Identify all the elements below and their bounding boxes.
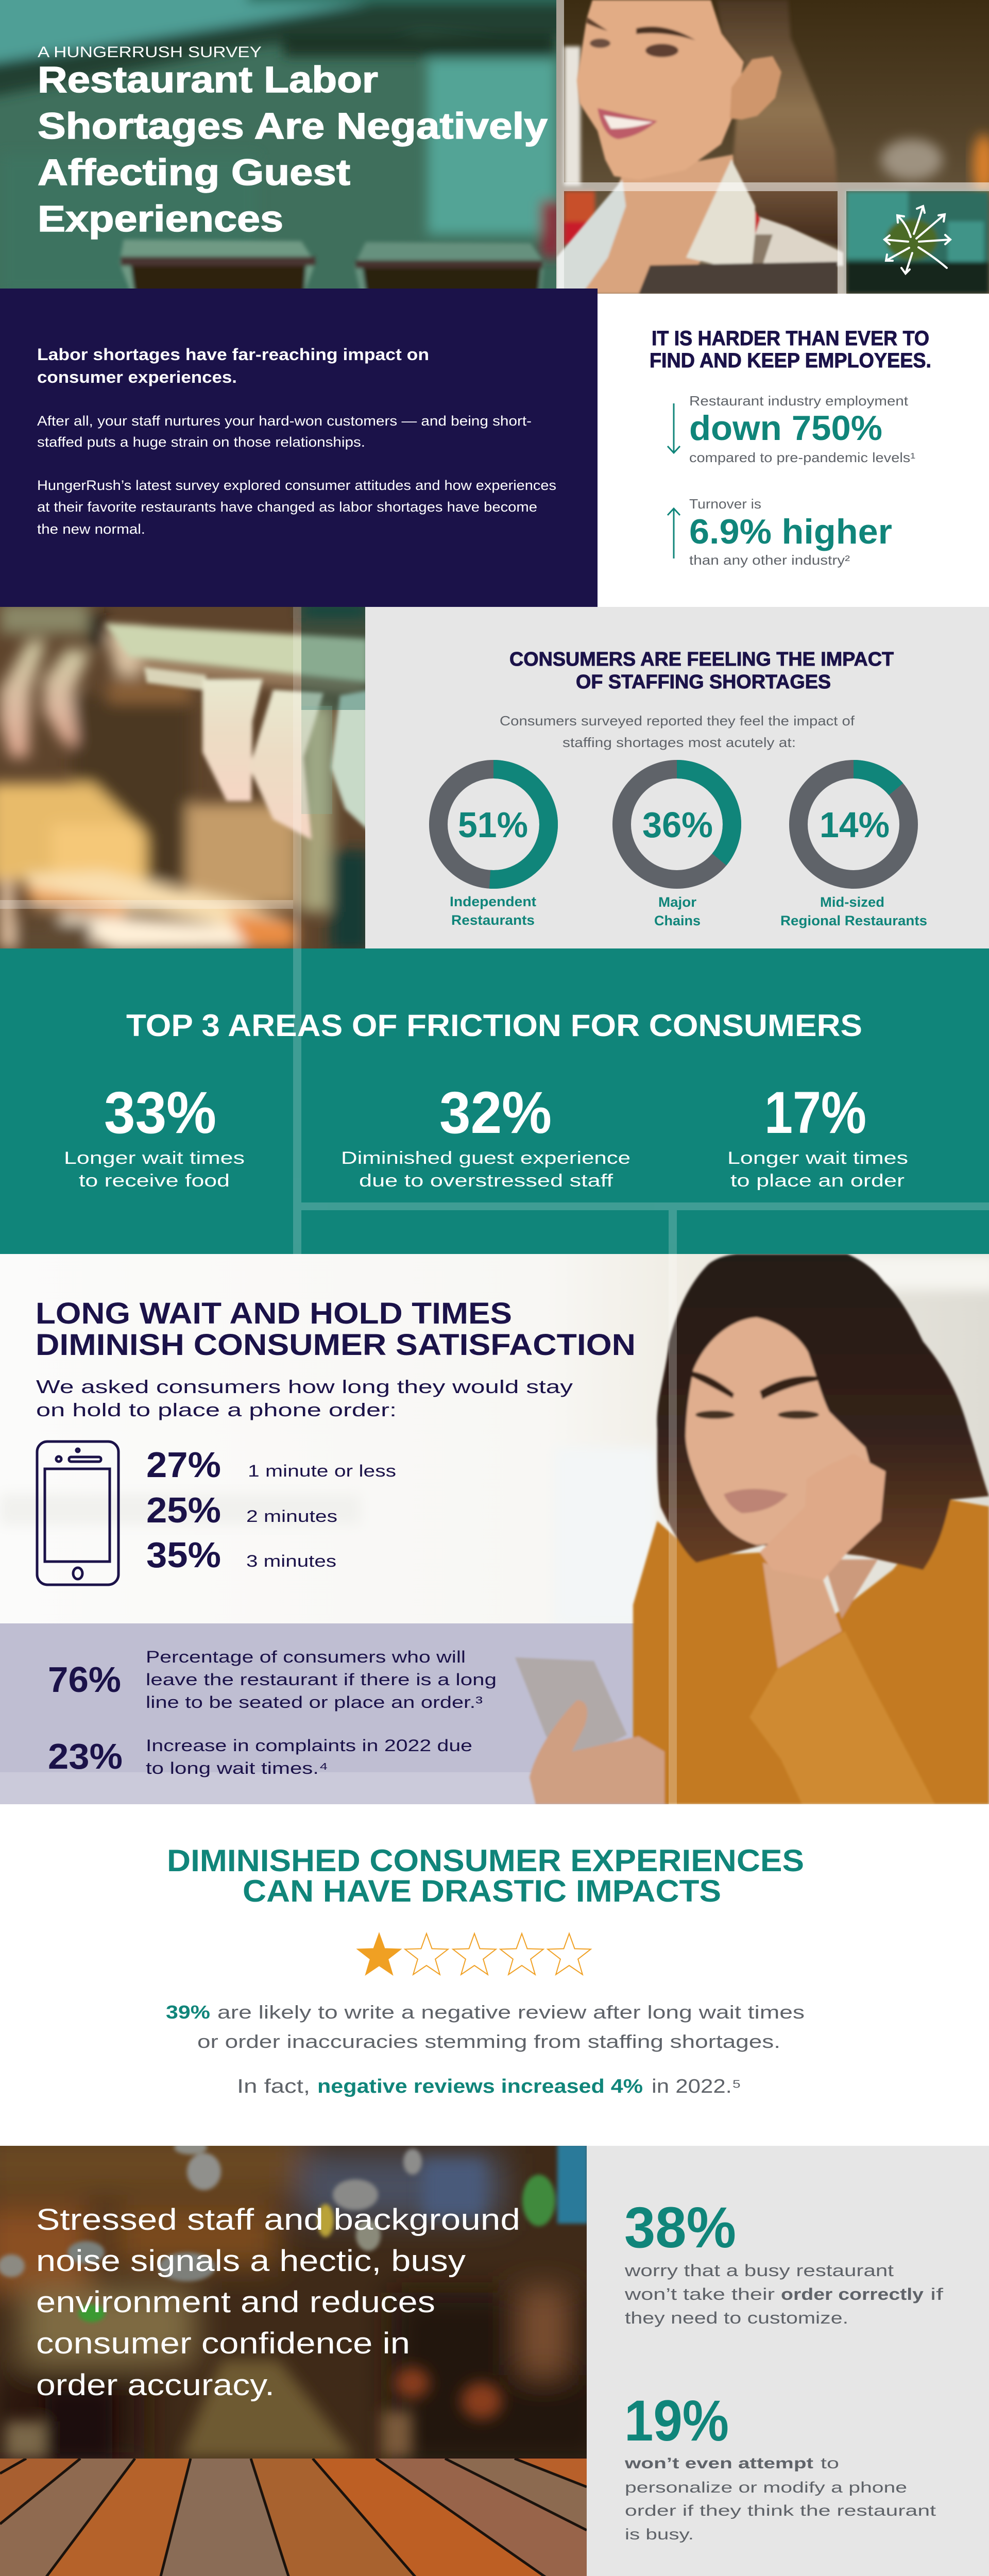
impact heading: CONSUMERS ARE FEELING THE IMPACT: [509, 649, 894, 670]
impact intro: [500, 713, 855, 750]
donut: 14% mid-sized regional: [780, 769, 927, 928]
stat: 76% leave: Percentage of consumers who will: [146, 1648, 466, 1666]
hold duration stats: 27%: [146, 1445, 221, 1485]
stat: employment: [689, 393, 915, 465]
panel: order accuracy stats: [587, 2146, 989, 2576]
negative review text: 39%: [166, 2002, 210, 2023]
impact heading: [509, 649, 894, 693]
hero right photo: smiling waitress: [556, 0, 989, 294]
panel: consumers feeling impact: [365, 607, 989, 948]
stressed staff statement: order accuracy.: [36, 2368, 275, 2402]
hold duration stats: 1 minute or less: [248, 1462, 396, 1480]
stat: 32%: 32%: [439, 1080, 552, 1146]
photo: kitchen order receipts: [0, 603, 371, 953]
negative review text: [166, 2002, 805, 2052]
intro body: HungerRush’s latest survey explored consumer attitudes and how experiences: [37, 478, 556, 493]
stats heading: IT IS HARDER THAN EVER TO: [652, 327, 929, 350]
reviews increased text: in 2022.⁵: [652, 2076, 741, 2097]
drastic heading: DIMINISHED CONSUMER EXPERIENCES: [167, 1843, 804, 1878]
impact intro: staffing shortages most acutely at:: [562, 735, 796, 750]
stat: turnover: than any other industry²: [689, 552, 850, 568]
stat: 17%: Longer wait times: [727, 1148, 908, 1168]
intro body: staffed puts a huge strain on those relationships.: [37, 434, 365, 450]
stat: 19%: personalize or modify a phone: [625, 2479, 907, 2496]
negative review text: are likely to write a negative review after long wait times: [217, 2002, 805, 2023]
stat: turnover: Turnover is: [689, 496, 761, 512]
wait intro: on hold to place a phone order:: [36, 1399, 397, 1420]
intro body: [37, 413, 556, 537]
stressed staff statement: [36, 2203, 520, 2402]
stat: 38%: order correctly: [781, 2285, 924, 2303]
stat: 38%: if: [930, 2285, 943, 2303]
photo: busy restaurant bokeh and table: [0, 2133, 608, 2576]
stat: 19%: 19%: [624, 2388, 729, 2453]
hero title: Affecting Guest: [38, 152, 350, 193]
icon: scattered arrows: [884, 206, 950, 274]
hold duration stats: 3 minutes: [246, 1552, 336, 1570]
icon: one of five stars: [357, 1934, 591, 1975]
stats heading: FIND AND KEEP EMPLOYEES.: [650, 349, 931, 372]
stat: 38%: [624, 2195, 943, 2327]
stat: 32%: [341, 1080, 630, 1191]
stat: employment: Restaurant industry employment: [689, 393, 909, 409]
wait heading: [36, 1297, 636, 1362]
hold duration stats: 2 minutes: [246, 1507, 337, 1526]
intro body: After all, your staff nurtures your hard-won customers — and being short-: [37, 413, 532, 429]
stressed staff statement: noise signals a hectic, busy: [36, 2244, 466, 2278]
hero title: Experiences: [38, 199, 283, 240]
stat: 76% leave: line to be seated or place an order.³: [146, 1693, 483, 1711]
stat: employment: down 750%: [689, 409, 882, 448]
impact intro: Consumers surveyed reported they feel the impact of: [500, 713, 855, 728]
stat: employment: compared to pre-pandemic levels¹: [689, 450, 915, 465]
donut: 51% independent restaurants: 51%: [458, 805, 528, 845]
stat: 19%: to: [821, 2455, 839, 2472]
stat: 23% complaints: to long wait times.⁴: [146, 1759, 328, 1777]
drastic heading: CAN HAVE DRASTIC IMPACTS: [243, 1874, 721, 1908]
friction heading: TOP 3 AREAS OF FRICTION FOR CONSUMERS: [126, 1008, 862, 1043]
donut: 51% independent restaurants: [438, 769, 549, 928]
stat: 19%: [624, 2388, 936, 2543]
grey stats overlay band: [0, 1623, 669, 1804]
donut: 36% major chains: Major: [658, 894, 696, 910]
stat: 38%: worry that a busy restaurant: [624, 2261, 894, 2280]
stat: 38%: 38%: [624, 2195, 736, 2260]
stat: 76% leave: leave the restaurant if there is a long: [146, 1670, 497, 1689]
stat: 17%: [727, 1080, 908, 1191]
icon: down arrow: [668, 403, 680, 453]
stat: 23% complaints: [48, 1736, 472, 1777]
stat: 17%: to place an order: [730, 1171, 905, 1191]
stat: 76% leave: 76%: [48, 1659, 121, 1700]
stat: 19%: is busy.: [625, 2526, 694, 2543]
wait heading: LONG WAIT AND HOLD TIMES: [36, 1297, 512, 1330]
wait heading: DIMINISH CONSUMER SATISFACTION: [36, 1328, 636, 1362]
stat: 76% leave: [48, 1648, 497, 1711]
stressed staff statement: Stressed staff and background: [36, 2203, 520, 2236]
negative review text: or order inaccuracies stemming from staffing shortages.: [197, 2031, 780, 2052]
stats heading: [650, 327, 931, 372]
donut: 36% major chains: [622, 769, 732, 928]
stat: turnover: [689, 496, 892, 568]
stat: turnover: 6.9% higher: [689, 512, 892, 551]
stat: 33%: Longer wait times: [64, 1148, 245, 1168]
intro body: the new normal.: [37, 521, 145, 537]
icon: phone: [37, 1442, 118, 1585]
stat: 19%: won’t even attempt: [624, 2455, 813, 2472]
stat: 32%: Diminished guest experience: [341, 1148, 630, 1168]
hold duration stats: [146, 1445, 396, 1575]
panel: top 3 friction: [0, 948, 989, 1254]
drastic heading: [167, 1843, 804, 1908]
reviews increased text: In fact,: [237, 2076, 310, 2097]
panel: long wait and hold times: [0, 1254, 989, 1804]
donut: 36% major chains: 36%: [642, 805, 713, 845]
icon: up arrow: [668, 509, 680, 558]
reviews increased text: negative reviews increased 4%: [317, 2076, 643, 2097]
stat: 33%: 33%: [104, 1080, 216, 1146]
donut: 36% major chains: Chains: [654, 913, 701, 928]
intro body: at their favorite restaurants have changed as labor shortages have become: [37, 499, 537, 515]
stat: 33%: to receive food: [79, 1171, 230, 1191]
impact heading: OF STAFFING SHORTAGES: [576, 671, 831, 693]
reviews increased text: [237, 2076, 741, 2097]
hero kicker: A HUNGERRUSH SURVEY: [38, 44, 262, 61]
donut: 14% mid-sized regional: Regional Restaurants: [780, 913, 927, 928]
stat: 23% complaints: 23%: [48, 1736, 123, 1776]
wait intro: We asked consumers how long they would stay: [36, 1376, 573, 1397]
donut: 14% mid-sized regional: 14%: [820, 805, 890, 845]
donut: 51% independent restaurants: Independent: [450, 894, 536, 909]
stressed staff statement: environment and reduces: [36, 2285, 435, 2319]
intro lead: [37, 345, 429, 386]
hero banner: [0, 0, 989, 296]
intro lead: consumer experiences.: [37, 368, 237, 386]
stat: 17%: 17%: [764, 1080, 866, 1146]
panel: intro navy: [0, 289, 598, 607]
intro lead: Labor shortages have far-reaching impact on: [37, 345, 429, 364]
stat: 38%: they need to customize.: [625, 2309, 848, 2327]
stat: 19%: order if they think the restaurant: [625, 2502, 936, 2519]
donut: 51% independent restaurants: Restaurants: [451, 912, 535, 928]
wait intro: [36, 1376, 573, 1420]
hero title: [38, 60, 548, 240]
hero translucent grid lines: [556, 0, 989, 294]
panel: harder than ever stats: [650, 327, 931, 568]
stat: 32%: due to overstressed staff: [359, 1171, 613, 1191]
hero title: Shortages Are Negatively: [38, 106, 548, 147]
hero title: Restaurant Labor: [38, 60, 378, 100]
photo: frustrated woman with phone: [0, 1254, 989, 1804]
hold duration stats: 25%: [146, 1490, 221, 1530]
panel: drastic impacts: [0, 1804, 989, 2146]
hero left photo: blurred cups: [0, 0, 572, 296]
stat: 33%: [64, 1080, 245, 1191]
stressed staff statement: consumer confidence in: [36, 2327, 410, 2360]
stat: 38%: won’t take their: [624, 2285, 775, 2303]
hold duration stats: 35%: [146, 1535, 221, 1575]
donut: 14% mid-sized regional: Mid-sized: [820, 894, 884, 910]
stat: 23% complaints: Increase in complaints in 2022 due: [146, 1736, 472, 1755]
